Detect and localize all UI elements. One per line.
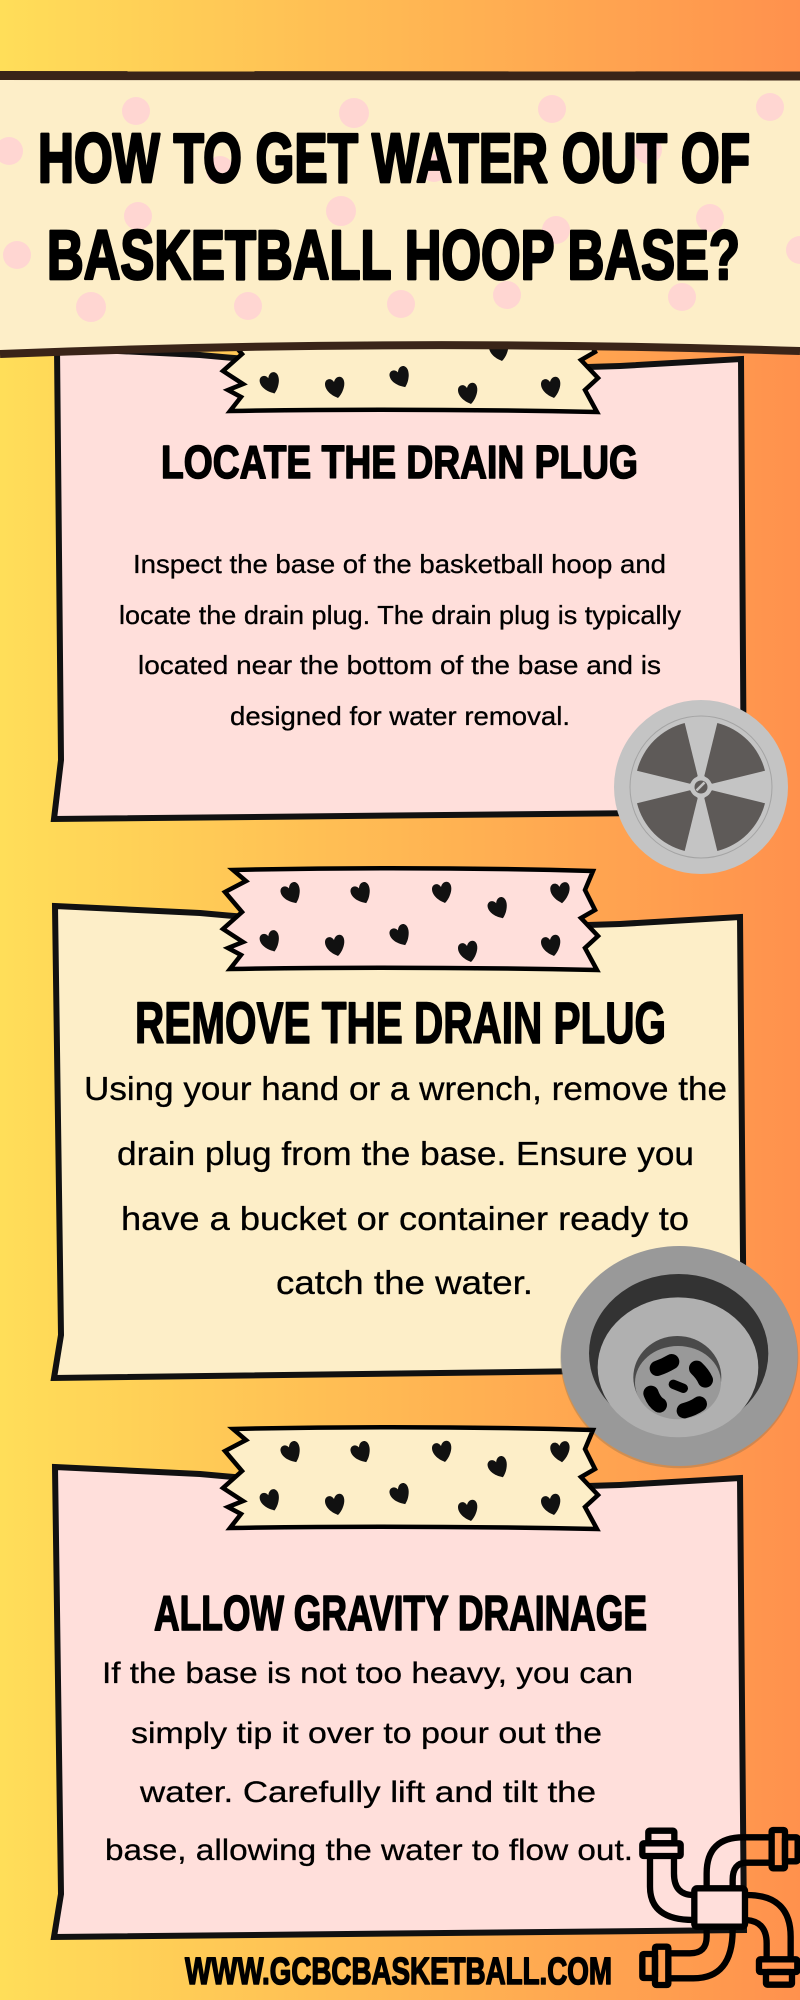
text: gravity step: water. Carefully lift and tilt the	[139, 1776, 596, 1809]
text: gravity step: If the base is not too heavy, you can	[102, 1657, 633, 1690]
icon: sink drain	[560, 1246, 798, 1468]
panel: allow gravity drainage	[54, 1427, 798, 1985]
text: gravity step	[102, 1657, 633, 1867]
washi tape: panel 2	[223, 868, 598, 970]
text: remove step: drain plug from the base. Ensure you	[117, 1135, 694, 1172]
text: locate step: Inspect the base of the basketball hoop and	[133, 549, 666, 579]
icon: drain cover	[614, 700, 788, 874]
title text	[38, 119, 750, 294]
washi tape: panel 1	[223, 310, 598, 412]
text: remove step: catch the water.	[276, 1264, 533, 1301]
heading: locate the drain plug: LOCATE THE DRAIN PLUG	[161, 436, 638, 488]
text: locate step: located near the bottom of the base and is	[138, 650, 661, 680]
text: remove step	[84, 1070, 727, 1301]
text: gravity step: base, allowing the water to flow out.	[105, 1834, 633, 1867]
icon: pipes	[642, 1830, 798, 1985]
polka dots	[0, 93, 800, 322]
panel: remove the drain plug	[54, 868, 798, 1468]
panel: locate the drain plug	[54, 310, 788, 874]
washi tape: panel 3	[223, 1427, 598, 1529]
text: locate step: designed for water removal.	[230, 701, 570, 731]
text: locate step	[119, 549, 681, 731]
title banner	[0, 75, 800, 354]
text: remove step: have a bucket or container ready to	[121, 1200, 689, 1237]
text: gravity step: simply tip it over to pour out the	[131, 1717, 602, 1750]
text: locate step: locate the drain plug. The drain plug is typically	[119, 600, 681, 630]
text: remove step: Using your hand or a wrench, remove the	[84, 1070, 727, 1107]
website footer: WWW.GCBCBASKETBALL.COM	[185, 1951, 612, 1993]
